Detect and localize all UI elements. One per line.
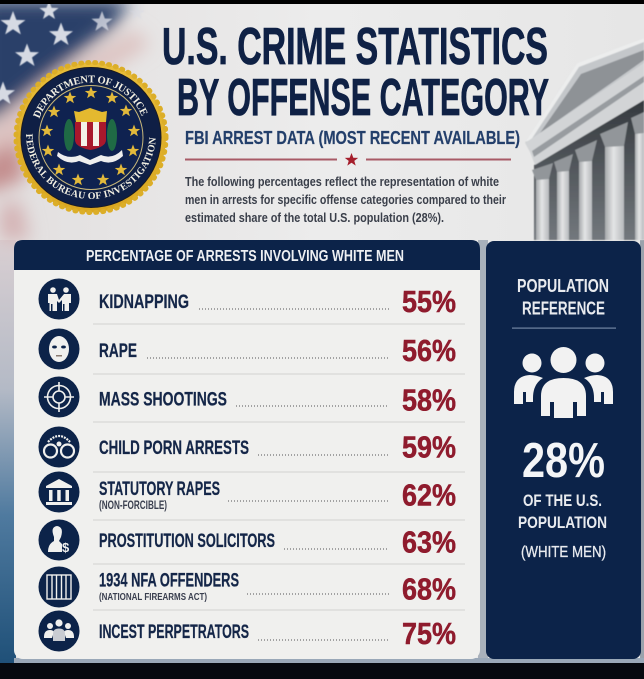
icon: three people [514,347,613,418]
sublabel: (NON-FORCIBLE) [99,500,167,512]
title [162,18,549,127]
building facade shade [534,100,644,240]
icon: american flag backdrop [0,0,150,240]
panel: arrests table [14,240,480,659]
row: prostitution solicitors [38,520,456,560]
seal ribbon [57,150,123,165]
row: incest perpetrators: 75% [402,617,456,651]
population caption: OF THE U.S. [523,491,602,510]
row: incest perpetrators: INCEST PERPETRATORS [99,621,249,643]
icon: family group [38,610,80,652]
row: mass shootings: 58% [402,384,456,418]
seal text top: DEPARTMENT OF JUSTICE [32,76,148,119]
row: child porn arrests: 59% [402,430,456,464]
table header: PERCENTAGE OF ARRESTS INVOLVING WHITE MEN [86,248,404,265]
row: kidnapping: 55% [402,285,456,319]
population caption: POPULATION [518,513,607,532]
population caption [518,491,607,561]
row: statutory rapes: STATUTORY RAPES [99,478,220,500]
seal shield [74,108,107,150]
icon: person with dollar [38,520,80,560]
seal: FBI [14,60,168,215]
row: kidnapping: KIDNAPPING [99,291,189,313]
row: rape: 56% [402,334,456,368]
row: child porn arrests [38,426,456,468]
icon: courthouse [38,472,80,512]
icon: courthouse building [525,38,644,240]
population heading [517,276,609,318]
row: 1934 nfa offenders: 68% [402,572,456,606]
divider with star [185,153,511,166]
row: 1934 nfa offenders: 1934 NFA OFFENDERS [99,570,239,592]
row: child porn arrests: CHILD PORN ARRESTS [99,437,249,459]
row: 1934 nfa offenders [38,566,456,608]
entablature [525,63,644,165]
sublabel: (NATIONAL FIREARMS ACT) [99,591,207,603]
panel: population reference [486,241,641,659]
population caption: (WHITE MEN) [521,544,606,561]
columns [532,112,644,240]
big figure: 28% [522,434,605,488]
icon: crosshair [38,376,80,418]
icon: jail bars [38,566,80,608]
seal text bottom: FEDERAL BUREAU OF INVESTIGATION [26,134,156,199]
row: rape [38,328,456,370]
icon: person with dollar: $ [62,540,70,555]
pediment [525,38,644,145]
row: prostitution solicitors: PROSTITUTION SOLICITORS [99,530,275,552]
icon: masked face [38,328,80,370]
population heading: POPULATION [517,276,609,296]
intro text: estimated share of the total U.S. population (28%). [185,211,444,225]
row: rape: RAPE [99,340,137,362]
row: statutory rapes [38,472,456,512]
intro text: The following percentages reflect the representation of white [185,175,499,189]
seal laurel [64,119,117,151]
row: mass shootings [38,376,456,418]
subtitle: FBI ARREST DATA (MOST RECENT AVAILABLE) [185,127,520,148]
population heading: REFERENCE [522,298,605,318]
row: incest perpetrators [38,610,456,652]
icon: handcuffs [38,426,80,468]
intro text: men in arrests for specific offense categories compared to their [185,193,506,207]
row: kidnapping [38,278,456,320]
seal stars [41,86,140,185]
table header [14,240,480,270]
row: statutory rapes: 62% [402,478,456,512]
icon: two figures [38,278,80,320]
row: mass shootings: MASS SHOOTINGS [99,388,227,410]
intro text [185,175,506,225]
row: prostitution solicitors: 63% [402,526,456,560]
